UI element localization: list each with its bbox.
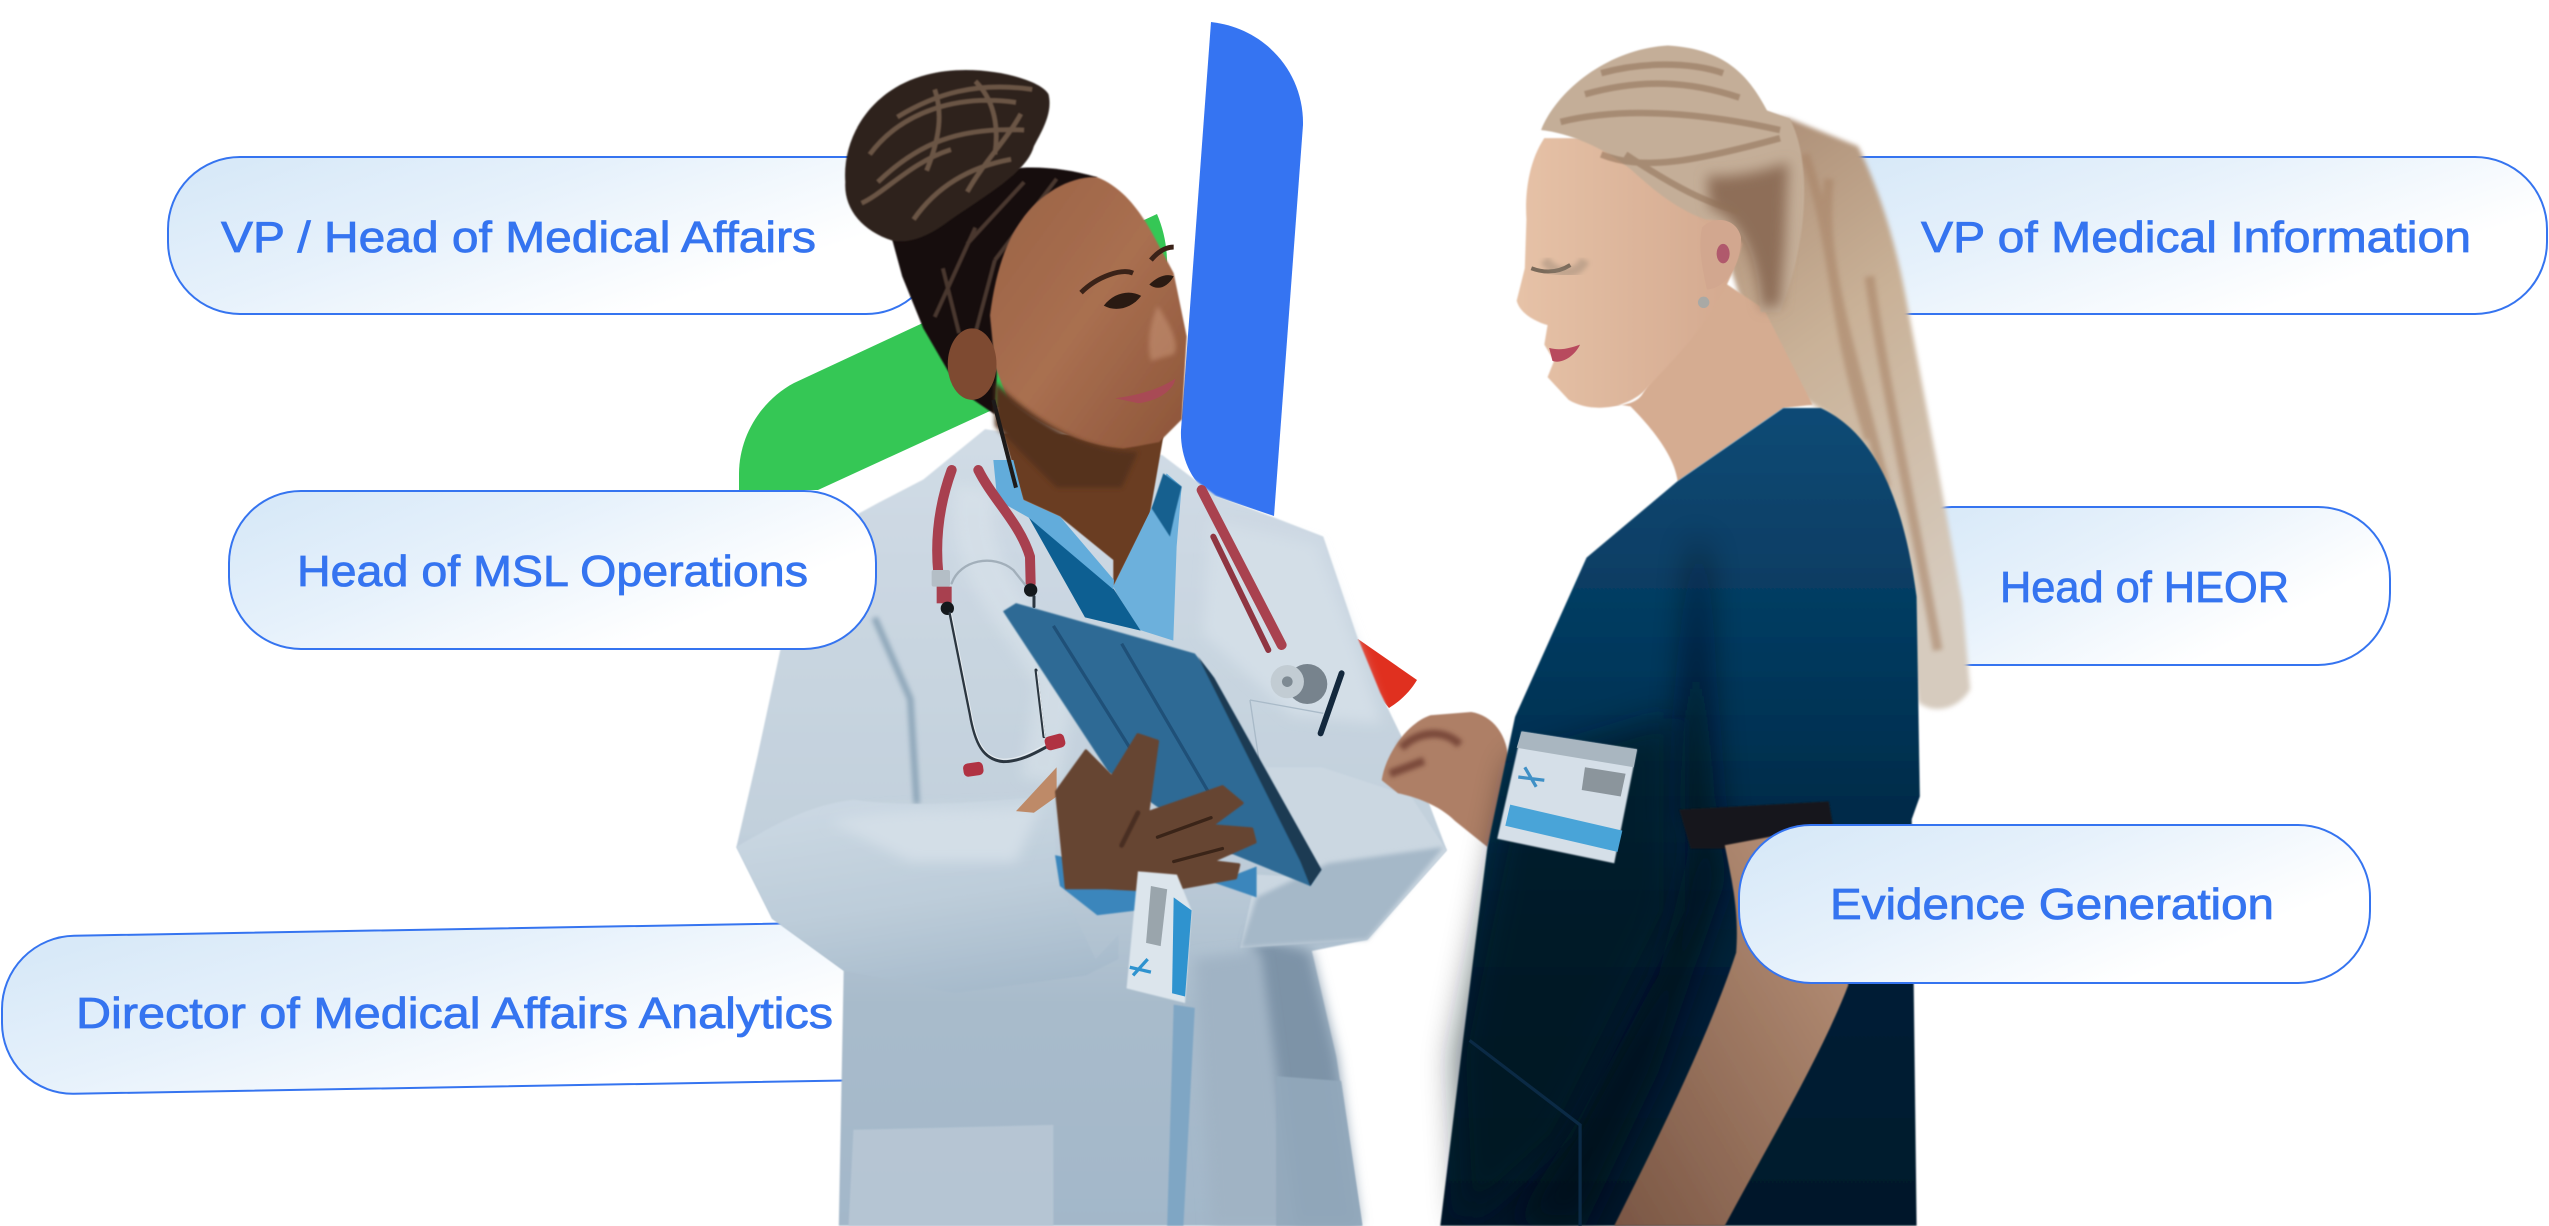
pill: Director of Medical Affairs Analytics xyxy=(2,920,962,1095)
nurse dark hair behind ear xyxy=(1707,163,1788,309)
green logo shape xyxy=(739,214,1167,490)
clear tubing loop xyxy=(952,561,1027,587)
pill: VP / Head of Medical Affairs: VP / Head of Medical Affairs xyxy=(221,213,816,262)
peach finger behind xyxy=(1016,767,1057,813)
inner red tube xyxy=(978,470,1031,583)
black clip right xyxy=(1024,583,1037,597)
nurse ponytail streaks xyxy=(1804,154,1938,650)
right red tube xyxy=(1202,490,1282,645)
tablet xyxy=(1003,603,1322,886)
nurse id badge xyxy=(1497,732,1637,863)
metal tube xyxy=(950,597,1053,762)
red eartip lower xyxy=(962,761,984,777)
pill: VP / Head of Medical Affairs xyxy=(168,157,938,314)
nurse ear xyxy=(1700,220,1741,289)
doctor left sleeve xyxy=(736,797,1118,993)
nurse hand xyxy=(1382,712,1509,847)
pill: VP of Medical Information: VP of Medical Information xyxy=(1921,213,2471,262)
doctor neck and chest skin xyxy=(1003,433,1163,587)
doctor bun highlights xyxy=(862,81,1032,219)
nurse hair top xyxy=(1541,46,1804,312)
pill: Head of MSL Operations xyxy=(229,491,876,649)
pill: Head of HEOR xyxy=(1880,507,2390,665)
doctor jaw shadow xyxy=(995,382,1138,488)
person: nurse in navy scrubs xyxy=(1382,46,1970,1226)
doctor braids xyxy=(935,179,1086,333)
doctor right sleeve xyxy=(1240,767,1447,948)
pill: Evidence Generation: Evidence Generation xyxy=(1830,880,2274,929)
doctor shirt right collar shade xyxy=(1152,473,1182,537)
blue logo shape xyxy=(1181,22,1303,516)
nurse arm xyxy=(1614,826,1848,1226)
pill: Head of MSL Operations: Head of MSL Operations xyxy=(297,547,808,596)
doctor shirt left collar xyxy=(993,460,1114,589)
nurse sleeve hem xyxy=(1679,801,1834,849)
nurse ponytail xyxy=(1723,114,1970,709)
doctor face xyxy=(990,177,1187,449)
right dark tube xyxy=(1213,537,1268,650)
doctor coat body xyxy=(736,429,1447,1226)
pen xyxy=(1321,673,1342,733)
doctor right coat chest highlight xyxy=(1203,520,1382,723)
chest piece back xyxy=(1287,664,1327,704)
pill: Head of HEOR: Head of HEOR xyxy=(2000,563,2289,612)
nurse earring xyxy=(1698,297,1709,308)
doctor hair bun xyxy=(845,70,1050,241)
nurse pocket xyxy=(1470,1040,1580,1226)
nurse finger detail xyxy=(1390,734,1460,774)
doctor hair back xyxy=(892,167,1097,415)
doctor pocket edge xyxy=(1250,700,1323,767)
pill: VP of Medical Information xyxy=(1790,157,2547,314)
chest piece front xyxy=(1271,665,1304,698)
red ferrule xyxy=(937,587,952,603)
person: doctor with tablet xyxy=(736,70,1447,1226)
shirt cuffs xyxy=(1055,855,1257,915)
left red tube xyxy=(937,470,952,573)
black clips xyxy=(941,602,954,615)
doctor coat shading xyxy=(849,488,1362,1226)
doctor id badge xyxy=(1127,871,1192,1003)
chest piece ring xyxy=(1282,676,1293,687)
pill: Evidence Generation xyxy=(1739,825,2370,983)
doctor shirt dark fold xyxy=(1028,517,1141,631)
nurse front darkening xyxy=(1455,715,1674,1226)
red eartip upper xyxy=(1044,733,1066,751)
doctor earring xyxy=(993,400,1016,488)
nurse neck xyxy=(1580,276,1813,481)
doctor brows, eyes, nose and lips xyxy=(1081,247,1176,403)
nurse hair strands xyxy=(1561,65,1780,211)
nurse eye and lips xyxy=(1531,260,1585,362)
nurse face xyxy=(1517,138,1743,408)
doctor shirt xyxy=(1113,473,1182,641)
nurse ear inner xyxy=(1717,244,1730,263)
doctor ear xyxy=(948,328,996,400)
pill: Director of Medical Affairs Analytics: Director of Medical Affairs Analytics xyxy=(76,989,833,1038)
silver connector xyxy=(932,570,950,587)
doctor left sleeve highlight xyxy=(829,805,1040,862)
nurse scrubs xyxy=(1440,408,1920,1226)
nurse scrubs front fold xyxy=(1512,536,1726,1226)
red logo shape xyxy=(1340,639,1417,708)
doctor hand xyxy=(1057,735,1255,891)
metal tube highlight xyxy=(951,613,1052,759)
doctor right cuff shade xyxy=(1240,847,1444,948)
stethoscope xyxy=(932,470,1342,777)
